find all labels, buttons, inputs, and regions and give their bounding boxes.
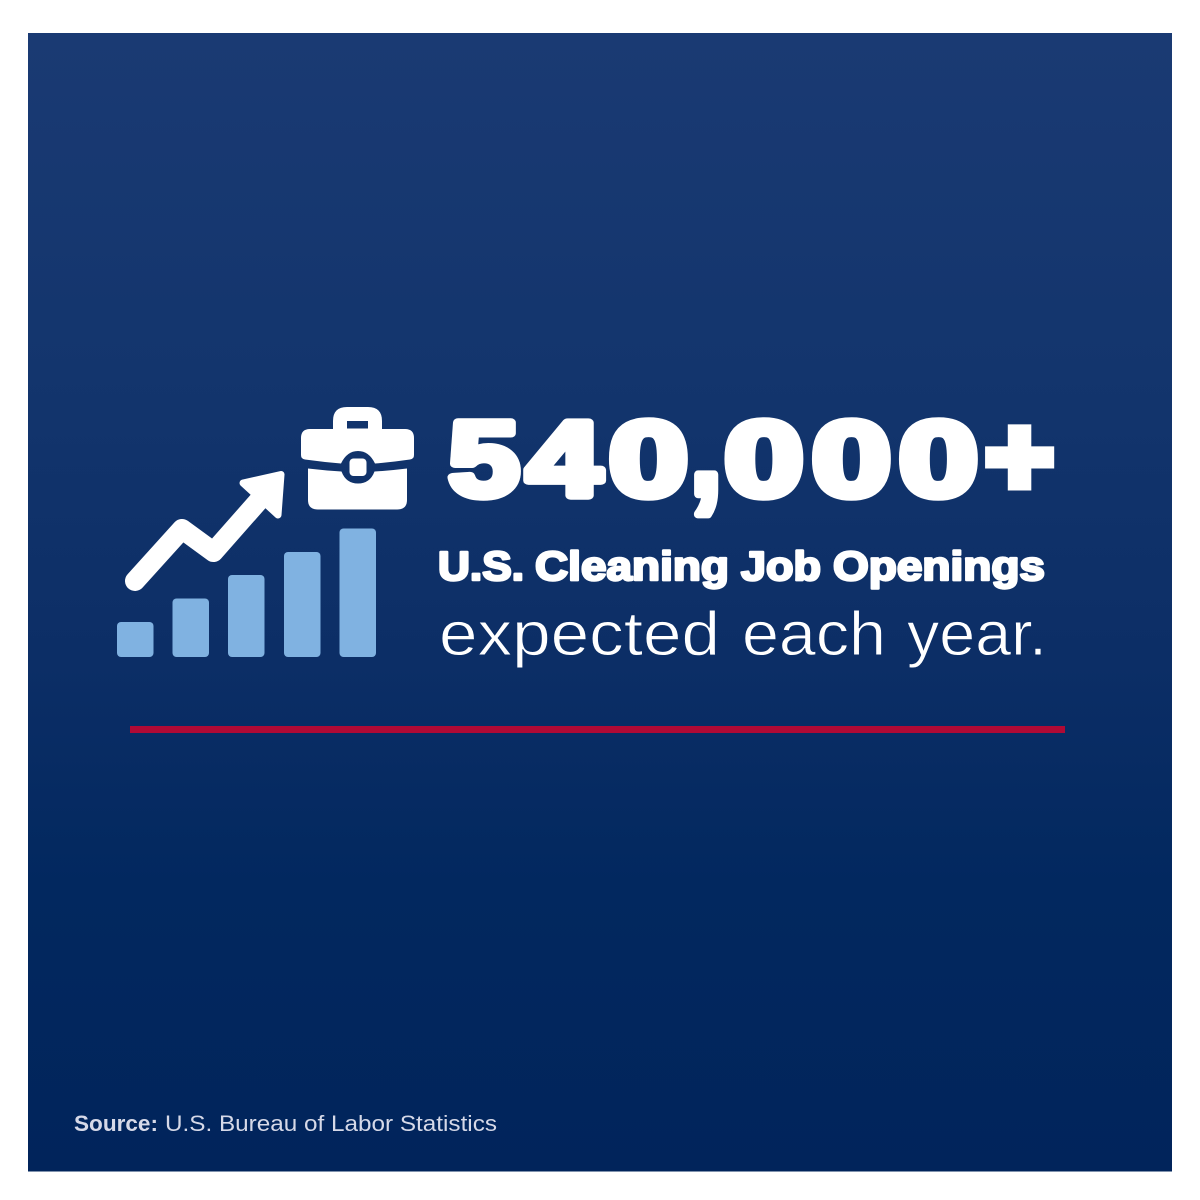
text: expected each year: each	[742, 600, 886, 669]
heading: big number: ,	[690, 377, 722, 522]
text: job openings label	[438, 543, 1045, 589]
text: source: Source:	[74, 1111, 158, 1136]
heading: big number: 5	[449, 400, 519, 518]
icon: rising arrow	[135, 474, 281, 581]
icon: briefcase	[301, 407, 414, 510]
text: source: U.S. Bureau of Labor Statistics	[165, 1111, 497, 1136]
text: expected each year: year.	[907, 600, 1047, 669]
heading: big number	[449, 377, 1054, 522]
heading: big number: 0	[812, 400, 891, 518]
text: expected each year: expected	[439, 600, 720, 669]
text: job openings label: Job	[741, 543, 821, 589]
text: expected each year	[439, 600, 1047, 669]
divider: red rule	[130, 726, 1065, 733]
heading: big number: 0	[899, 400, 978, 518]
text: job openings label: Cleaning	[535, 543, 729, 589]
heading: big number: 0	[609, 400, 688, 518]
heading: big number: +	[985, 395, 1054, 518]
icon: growth chart with arrow	[117, 474, 376, 657]
heading: big number: 0	[724, 400, 804, 518]
text: job openings label: U.S.	[438, 543, 524, 589]
bar chart: rising bars	[117, 528, 376, 657]
text: job openings label: Openings	[833, 543, 1045, 589]
heading: big number: 4	[527, 399, 601, 518]
